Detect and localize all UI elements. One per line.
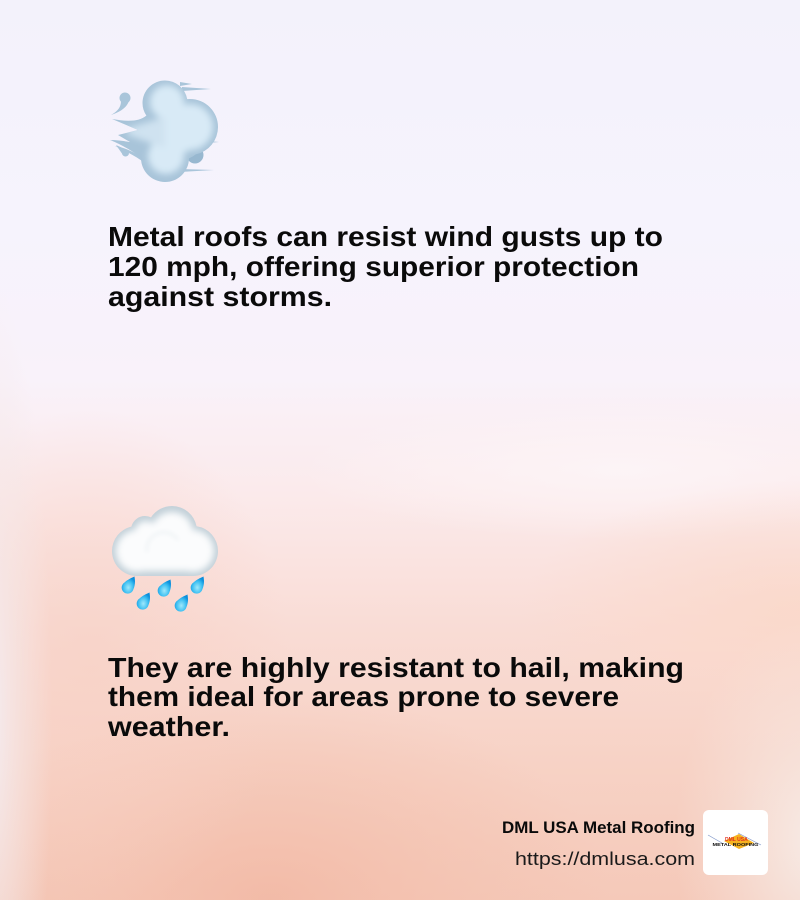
- brand name: DML USA Metal Roofing: [502, 819, 695, 837]
- text block: hail resistance: [107, 652, 684, 742]
- logo tile: [703, 810, 768, 875]
- icon: wind cloud: [110, 80, 218, 182]
- text block: hail resistance: weather.: [107, 711, 230, 742]
- text block: wind resistance: 120 mph, offering superior protection: [108, 251, 639, 282]
- icon: logo mark: DML USA: [725, 837, 748, 843]
- text block: wind resistance: against storms.: [108, 281, 332, 312]
- text block: hail resistance: them ideal for areas prone to severe: [108, 681, 619, 712]
- text block: wind resistance: Metal roofs can resist wind gusts up to: [108, 221, 663, 252]
- icon: rain cloud: [112, 506, 218, 612]
- text block: hail resistance: They are highly resistant to hail, making: [108, 652, 684, 683]
- text block: wind resistance: [108, 221, 663, 312]
- icon: logo mark: METAL ROOFING: [712, 842, 759, 848]
- brand url: https://dmlusa.com: [515, 848, 695, 869]
- icon: logo mark: [708, 833, 761, 849]
